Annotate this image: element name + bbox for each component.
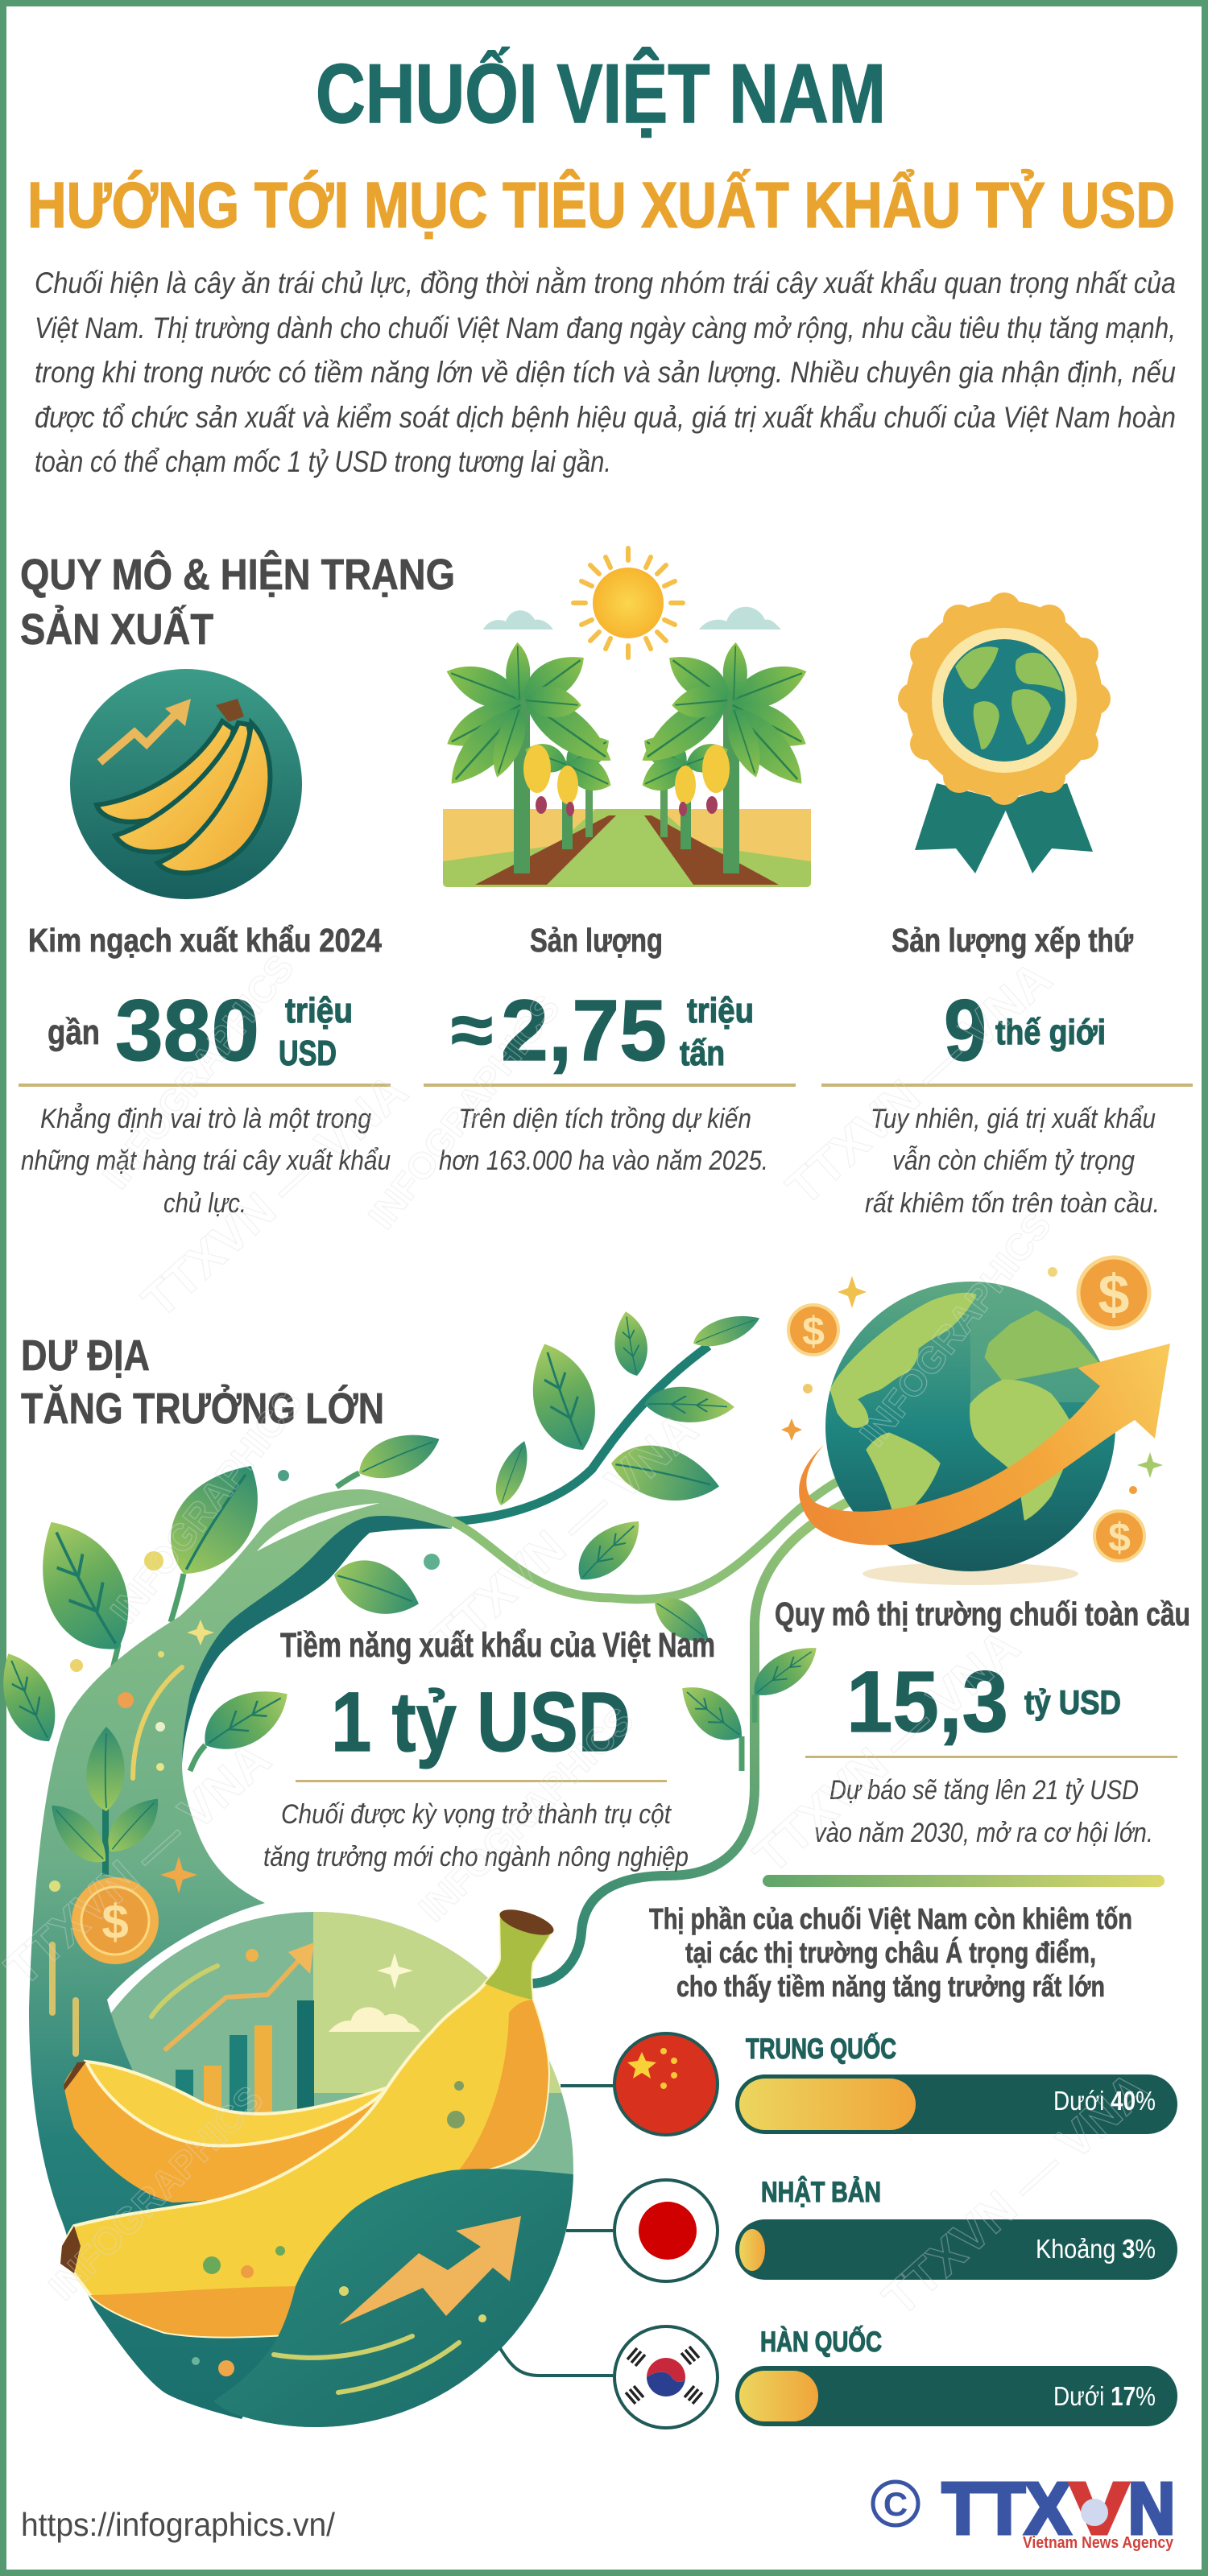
description: vẫn còn chiếm tỷ trọng — [892, 1146, 1135, 1176]
description: Dự báo sẽ tăng lên 21 tỷ USD — [829, 1775, 1139, 1806]
connector lines from banana to flags — [500, 2086, 613, 2376]
watermarks: INFOGRAPHICS — [40, 2078, 271, 2308]
number: 380 million USD: triệu — [285, 991, 353, 1030]
icon: South Korea flag — [614, 2326, 718, 2428]
orange ring arrow — [799, 1344, 1170, 1545]
description — [814, 1775, 1153, 1848]
sparkles — [781, 1267, 1163, 1494]
number: 9th in the world: thế giới — [995, 1013, 1106, 1052]
icon: banana bunch in teal circle — [70, 669, 302, 899]
watermarks: INFOGRAPHICS — [94, 947, 302, 1196]
icon: Japan flag — [614, 2180, 718, 2281]
market row: Japan: NHẬT BẢN — [761, 2176, 881, 2208]
description: vào năm 2030, mở ra cơ hội lớn. — [814, 1818, 1153, 1848]
watermarks: INFOGRAPHICS — [411, 1699, 641, 1930]
section heading: production scale: SẢN XUẤT — [20, 605, 213, 654]
market row: South Korea — [614, 2326, 1177, 2428]
stat: global banana market: 15,3 — [846, 1653, 1008, 1750]
title: CHUỐI VIỆT NAM — [316, 47, 886, 141]
watermarks: TTXVN — VNA — [873, 2062, 1158, 2326]
description: những mặt hàng trái cây xuất khẩu — [21, 1146, 391, 1176]
upper branch — [452, 1346, 709, 1521]
stat: output — [424, 922, 796, 1176]
section heading: growth room: TĂNG TRƯỞNG LỚN — [21, 1385, 384, 1433]
ground — [443, 809, 811, 887]
source url: https://infographics.vn/ — [21, 2506, 336, 2543]
market share heading — [649, 1902, 1132, 2003]
green divider bar — [763, 1875, 1165, 1887]
bar: under 17%: Dưới 17% — [1053, 2381, 1156, 2411]
number: 2,75 million tons — [451, 981, 754, 1079]
watermarks: TTXVN — VNA — [744, 1619, 1029, 1884]
number: 9th in the world: 9 — [944, 981, 987, 1079]
watermarks: INFOGRAPHICS — [360, 987, 568, 1236]
number: 2,75 million tons: 2,75 — [501, 981, 667, 1079]
chart bars and trend — [151, 1942, 420, 2126]
market row: China: TRUNG QUỐC — [746, 2033, 896, 2065]
number: 380 million USD: gần — [48, 1013, 100, 1052]
coins — [788, 1257, 1149, 1561]
section heading: production scale: QUY MÔ & HIỆN TRẠNG — [20, 550, 455, 599]
dots — [70, 1470, 440, 1672]
watermarks: INFOGRAPHICS — [102, 1381, 310, 1631]
coins: $ — [1098, 1263, 1129, 1326]
left banana palms — [438, 642, 622, 873]
number: 9th in the world — [944, 981, 1106, 1079]
stat: global banana market — [775, 1596, 1190, 1848]
intro paragraph: toàn có thể chạm mốc 1 tỷ USD trong tương lai gần. — [35, 445, 611, 478]
watermarks: TTXVN — VNA — [0, 1732, 280, 1996]
stat: export turnover — [19, 922, 391, 1219]
upper banana — [64, 2062, 388, 2202]
market share heading: tại các thị trường châu Á trọng điểm, — [685, 1936, 1096, 1969]
icon: sun — [573, 548, 683, 658]
market row: China — [614, 2033, 1177, 2135]
market row: South Korea: HÀN QUỐC — [760, 2326, 882, 2358]
right banana palms — [631, 642, 815, 873]
description: hơn 163.000 ha vào năm 2025. — [439, 1146, 768, 1176]
number: 380 million USD — [48, 981, 353, 1079]
bar: under 40%: Dưới 40% — [1053, 2086, 1156, 2116]
title — [27, 47, 1175, 241]
circle background — [48, 1908, 579, 2431]
illustration: banana plantation with sun — [438, 548, 815, 887]
description: chủ lực. — [163, 1188, 246, 1219]
lower vine from banana to globe — [532, 1499, 854, 1984]
TTXVN logo: N — [1128, 2469, 1175, 2549]
copyright and agency logo — [873, 2469, 1175, 2552]
copyright symbol — [873, 2482, 918, 2525]
bar: about 3% — [735, 2219, 1177, 2280]
tree trunk — [29, 1489, 452, 2419]
continents — [831, 1294, 1097, 1519]
description: rất khiêm tốn trên toàn cầu. — [865, 1188, 1160, 1219]
description — [21, 1104, 391, 1219]
bar: about 3%: Khoảng 3% — [1036, 2234, 1156, 2264]
leaf stems — [110, 1473, 755, 1771]
dark inner ribbon of trunk — [182, 1516, 452, 1764]
bar: under 40% — [735, 2074, 1177, 2134]
illustration: globe with rising arrow and coins — [781, 1257, 1170, 1585]
market row: Japan — [614, 2176, 1177, 2281]
stat: global banana market: tỷ USD — [1024, 1683, 1121, 1721]
lower banana — [60, 1905, 556, 2337]
stat: Vietnam export potential — [263, 1626, 715, 1872]
TTXVN logo: Vietnam News Agency — [1023, 2534, 1174, 2552]
illustration: growth vines and leaves — [0, 1307, 854, 1984]
description: Trên diện tích trồng dự kiến — [458, 1104, 751, 1134]
watermarks: TTXVN — VNA — [132, 1063, 417, 1328]
stat: Vietnam export potential: Tiềm năng xuất khẩu của Việt Nam — [280, 1626, 715, 1665]
icon: clouds — [483, 607, 781, 630]
coins: $ — [802, 1309, 825, 1354]
stat: world ranking: Sản lượng xếp thứ — [892, 922, 1133, 959]
watermarks: TTXVN — VNA — [422, 1402, 707, 1666]
stat: output: Sản lượng — [530, 922, 663, 959]
stat: export turnover: Kim ngạch xuất khẩu 2024 — [28, 922, 382, 959]
light vine to globe — [447, 1477, 846, 1600]
icon: dollar coin — [72, 1877, 159, 1964]
section heading: growth room: DƯ ĐỊA — [21, 1331, 150, 1380]
stat: world ranking — [821, 922, 1193, 1219]
bottom teal leaf with rising arrow — [192, 2169, 580, 2431]
description: Khẳng định vai trò là một trong — [40, 1104, 371, 1134]
icon: dollar coin: $ — [101, 1895, 129, 1949]
trunk decorations: sprout, coin, stars — [39, 1620, 214, 2057]
bar: under 17% — [735, 2366, 1177, 2426]
watermarks: TTXVN — VNA — [776, 951, 1061, 1216]
leaves — [0, 1307, 825, 1765]
intro paragraph — [35, 266, 1176, 478]
number: 380 million USD: 380 — [115, 981, 259, 1079]
number: 2,75 million tons: ≈ — [451, 990, 493, 1071]
coins: $ — [1108, 1515, 1131, 1560]
number: 380 million USD: USD — [279, 1034, 337, 1073]
illustration: banana circle with trunk — [29, 1489, 580, 2431]
description: tăng trưởng mới cho ngành nông nghiệp — [263, 1842, 689, 1872]
TTXVN logo — [942, 2469, 1175, 2552]
number: 2,75 million tons: tấn — [680, 1034, 725, 1073]
description — [865, 1104, 1160, 1219]
section heading: growth room — [21, 1331, 384, 1433]
watermarks — [0, 947, 1158, 2326]
market share heading: cho thấy tiềm năng tăng trưởng rất lớn — [676, 1970, 1105, 2003]
watermarks: INFOGRAPHICS — [851, 1204, 1059, 1454]
description: Chuối được kỳ vọng trở thành trụ cột — [281, 1799, 672, 1830]
copyright symbol: C — [883, 2485, 908, 2523]
TTXVN logo: TTX — [942, 2469, 1070, 2549]
section heading: production scale — [20, 550, 455, 654]
icon: medal with globe — [898, 592, 1111, 873]
icon: China flag — [614, 2033, 718, 2135]
number: 2,75 million tons: triệu — [687, 991, 754, 1030]
description: Tuy nhiên, giá trị xuất khẩu — [871, 1104, 1156, 1134]
stat: Vietnam export potential: 1 tỷ USD — [331, 1675, 631, 1769]
description — [439, 1104, 768, 1176]
description — [263, 1799, 689, 1872]
TTXVN logo: V — [1070, 2469, 1128, 2549]
